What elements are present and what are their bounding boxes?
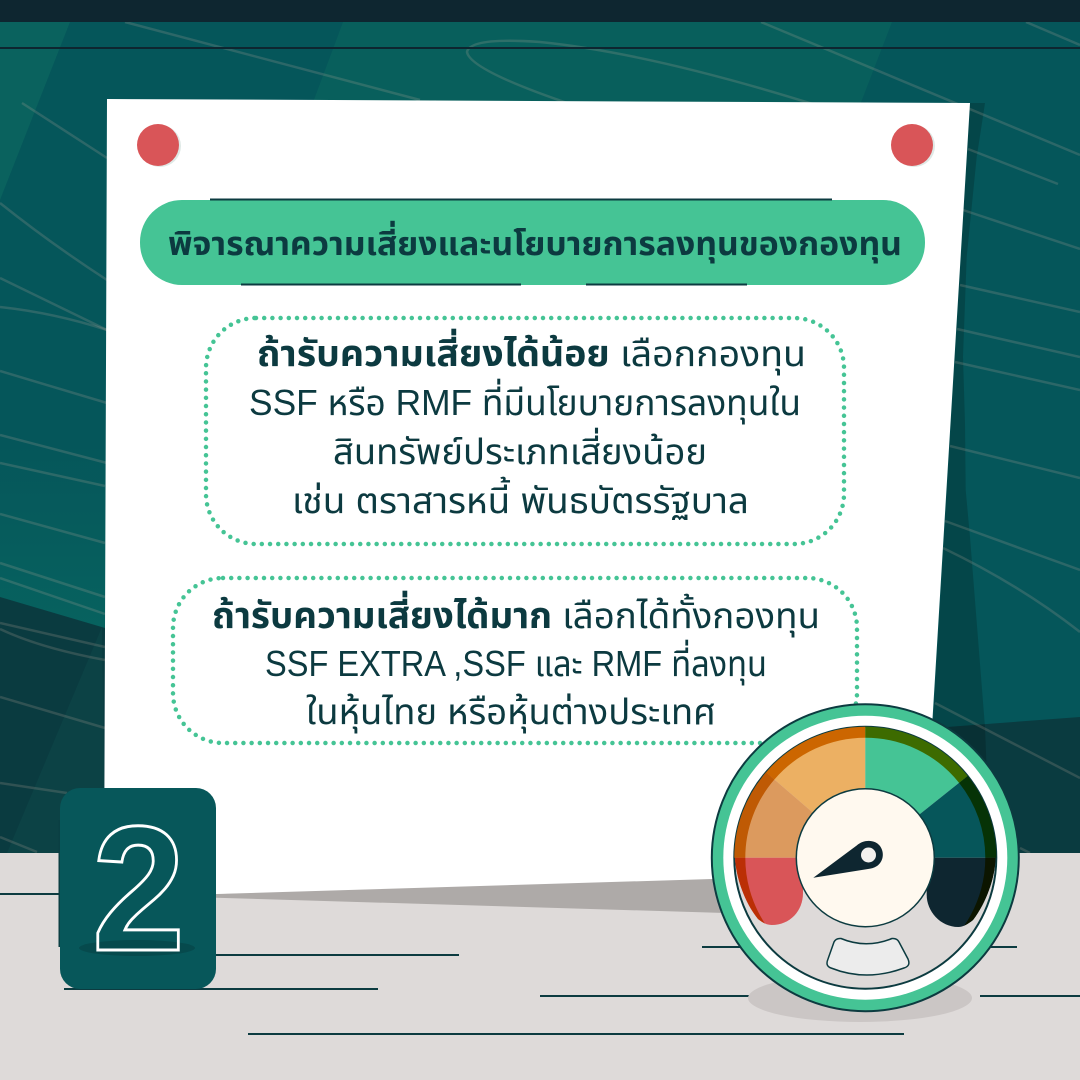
number 2: 2 <box>92 789 185 988</box>
gauge plate <box>827 938 909 975</box>
gauge ring <box>712 704 1019 1011</box>
low risk text: สินทรัพย์ประเภทเสี่ยงน้อย <box>333 427 707 472</box>
paper shadow on wall <box>925 103 990 853</box>
gauge needle <box>813 841 883 878</box>
panel: high risk <box>173 578 857 743</box>
paper shadow on floor <box>216 870 760 914</box>
number card <box>60 788 216 989</box>
high risk text: ในหุ้นไทย หรือหุ้นต่างประเทศ <box>306 691 716 733</box>
gauge segment: orange <box>766 727 865 858</box>
low risk text: ถ้ารับความเสี่ยงได้น้อย เลือกกองทุน <box>257 328 806 375</box>
gauge segment: teal <box>865 776 996 858</box>
gauge <box>712 704 1019 1022</box>
heading pill <box>140 200 925 285</box>
pin left <box>137 124 181 167</box>
pin right <box>891 124 935 167</box>
gauge segment: red <box>735 858 803 925</box>
gauge rim bands <box>734 726 996 926</box>
panel: low risk <box>206 318 844 544</box>
heading text: พิจารณาความเสี่ยงและนโยบายการลงทุนของกองทุน <box>168 220 902 264</box>
gauge segment: light brown <box>735 773 865 858</box>
high risk text <box>212 590 820 733</box>
gauge segment: navy <box>927 858 996 927</box>
paper sheet <box>104 99 970 894</box>
gauge segment: green <box>865 727 967 858</box>
low risk text: SSF หรือ RMF ที่มีนโยบายการลงทุนใน <box>249 378 801 424</box>
high risk text: ถ้ารับความเสี่ยงได้มาก เลือกได้ทั้งกองทุน <box>212 590 820 637</box>
gauge dial <box>796 789 934 927</box>
top dark bar <box>0 0 1080 22</box>
high risk text: SSF EXTRA ,SSF และ RMF ที่ลงทุน <box>265 639 767 685</box>
floor <box>0 853 1080 1080</box>
low risk text: เช่น ตราสารหนี้ พันธบัตรรัฐบาล <box>292 476 749 521</box>
low risk text <box>249 328 806 521</box>
